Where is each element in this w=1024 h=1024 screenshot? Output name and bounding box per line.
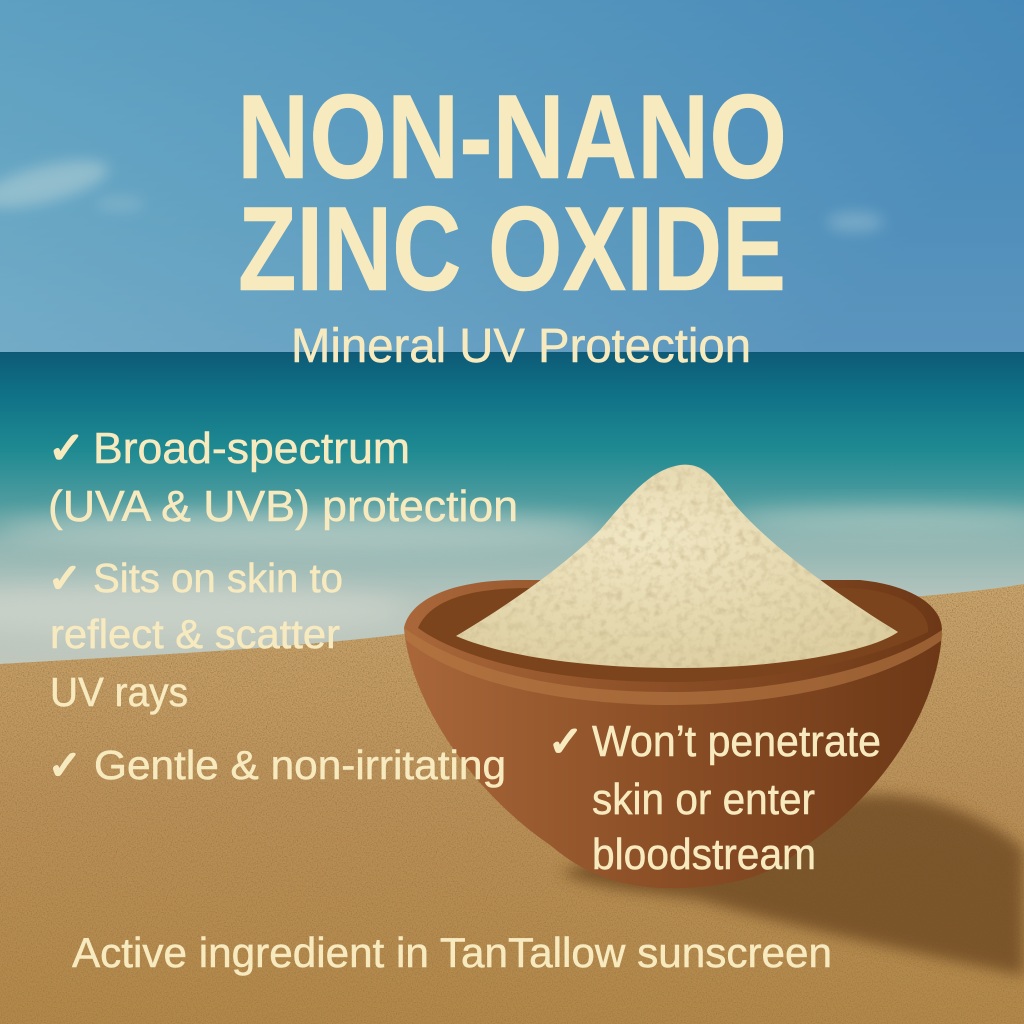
title: ZINC OXIDE [238, 182, 786, 316]
benefit: won't penetrate: Won’t penetrate [592, 717, 881, 766]
title: NON-NANO [237, 70, 787, 204]
benefit: sits on skin: reflect & scatter [50, 611, 340, 657]
benefit: sits on skin [48, 555, 343, 715]
benefit: sits on skin: ✓ [48, 557, 82, 601]
background: sky [0, 0, 1024, 356]
background: sea [0, 352, 1024, 680]
bowl [404, 580, 942, 888]
benefit: won't penetrate: ✓ [548, 718, 583, 765]
benefit: broad-spectrum: ✓ [48, 424, 85, 473]
benefit: broad-spectrum: (UVA & UVB) protection [48, 482, 518, 531]
benefit: sits on skin: UV rays [50, 669, 188, 715]
benefit: won't penetrate: bloodstream [592, 830, 816, 879]
background: sand [0, 580, 1024, 1024]
benefit: sits on skin: Sits on skin to [93, 555, 343, 601]
benefit: gentle: ✓ [48, 744, 82, 788]
benefit: won't penetrate: skin or enter [592, 775, 815, 824]
benefit: broad-spectrum [48, 424, 518, 531]
footer caption: Active ingredient in TanTallow sunscreen [72, 929, 832, 976]
benefit: broad-spectrum: Broad-spectrum [93, 424, 410, 473]
benefit: won't penetrate [548, 717, 881, 879]
benefit: gentle: Gentle & non-irritating [94, 742, 506, 788]
bowl shadow [560, 795, 1024, 976]
zinc oxide powder pile [450, 460, 900, 670]
subtitle: Mineral UV Protection [291, 320, 751, 373]
title [237, 70, 787, 316]
